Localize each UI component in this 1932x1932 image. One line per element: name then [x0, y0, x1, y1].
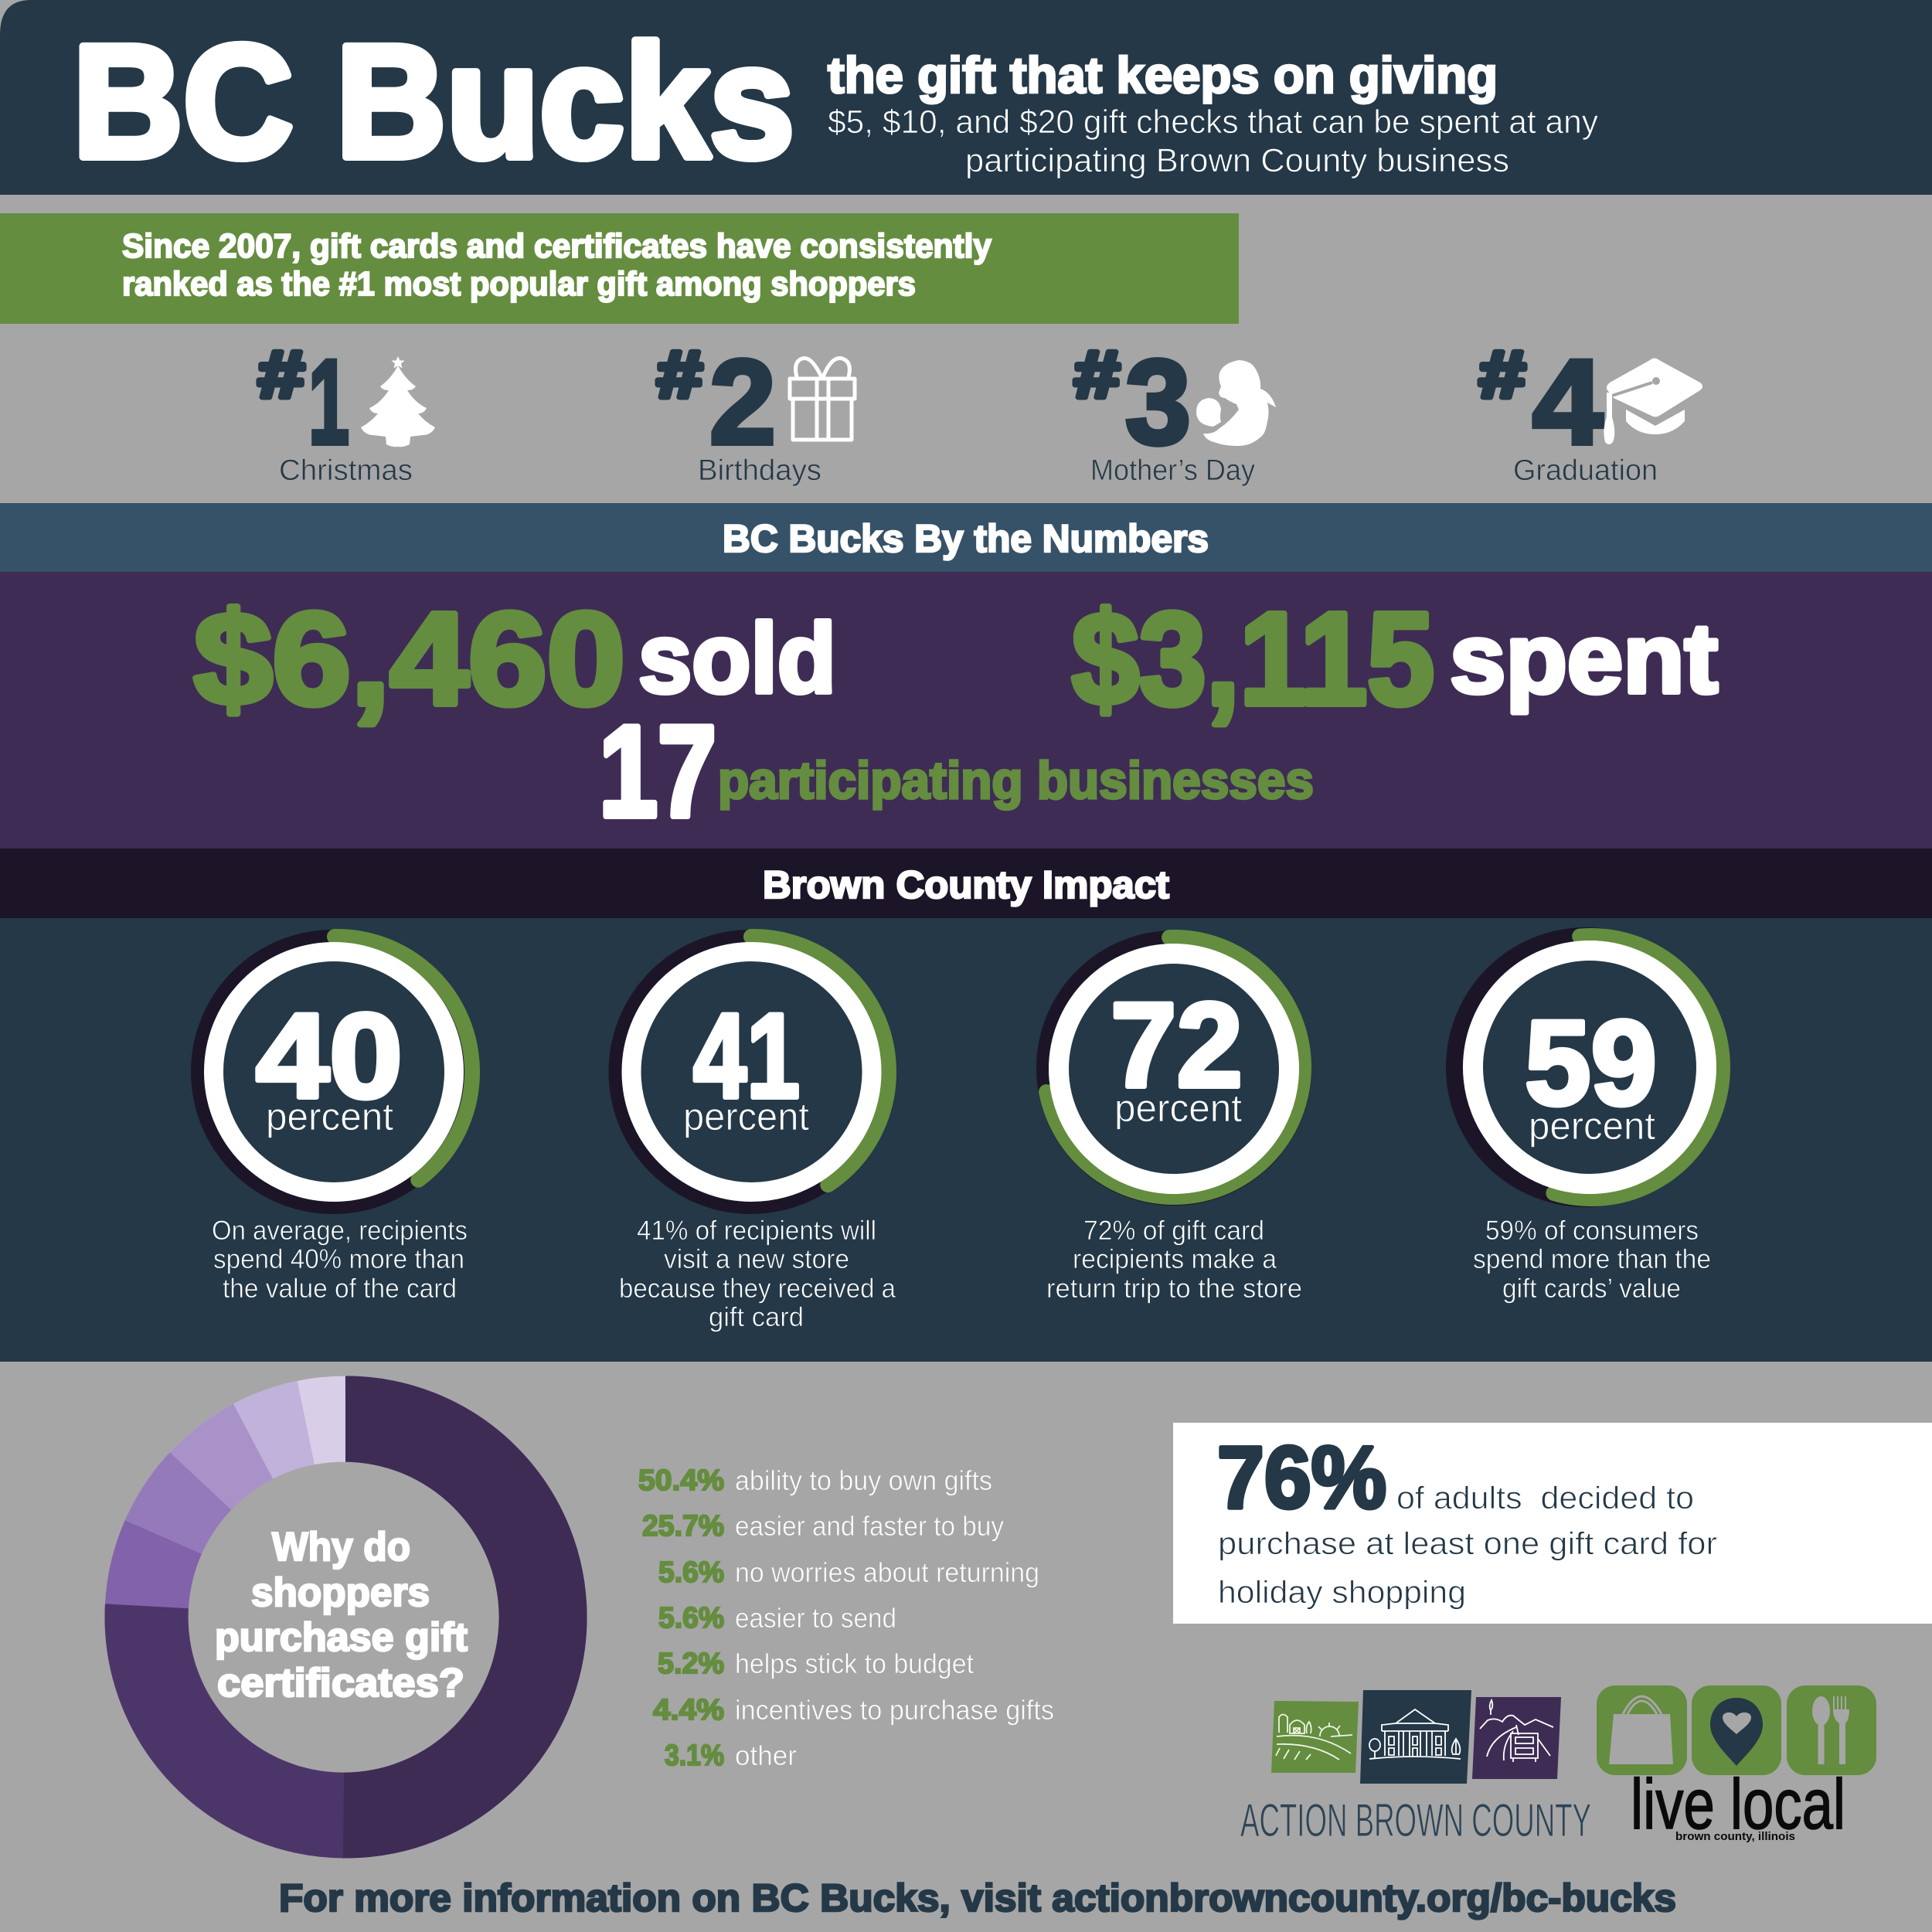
heading band: by the numbers: BC Bucks By the Numbers: [723, 517, 1209, 560]
caption: 59 percent: 59% of consumers: [1485, 1216, 1699, 1246]
logo tile: road and bus: [1472, 1697, 1561, 1779]
heading band: Brown County Impact: Brown County Impact: [763, 863, 1169, 906]
banner text: Since 2007, gift cards and certificates have consistently: [122, 227, 992, 265]
panel: impact: [0, 918, 1932, 1362]
icon: christmas tree: [361, 356, 435, 447]
caption: 59 percent: gift cards’ value: [1502, 1274, 1681, 1304]
rank 2 Birthdays: [657, 335, 855, 487]
title: BC Bucks: [73, 12, 794, 192]
caption: 72 percent: recipients make a: [1073, 1244, 1277, 1274]
rank 1 Christmas: 1: [308, 335, 349, 470]
stat: sold: sold: [638, 604, 836, 714]
callout text: of adults decided to: [1396, 1480, 1694, 1515]
stat: participating businesses: 17: [599, 699, 716, 844]
logo tile: farm: [1271, 1701, 1359, 1773]
callout: 76 percent: [1173, 1423, 1932, 1624]
rank 2 Birthdays: #: [657, 338, 702, 412]
stat ring: 40 percent: [199, 934, 474, 1209]
callout text: holiday shopping: [1218, 1574, 1466, 1610]
logo tile: courthouse: [1360, 1690, 1471, 1784]
reason labels: incentives to purchase gifts: [735, 1694, 1054, 1726]
reason labels: ability to buy own gifts: [735, 1464, 992, 1496]
percentages: 3.1%: [665, 1740, 724, 1772]
logo: live local: [1597, 1685, 1876, 1844]
banner text: ranked as the #1 most popular gift among shoppers: [122, 265, 916, 303]
rank 4 Graduation: #: [1479, 338, 1526, 412]
donut centre question: purchase gift: [215, 1615, 468, 1660]
footer call to action: For more information on BC Bucks, visit actionbrowncounty.org/bc-bucks: [279, 1876, 1676, 1920]
icon: spoon and fork: [1787, 1685, 1876, 1775]
stat ring: 40 percent: percent: [266, 1095, 393, 1138]
description: participating Brown County business: [965, 142, 1509, 179]
stat: spent: [1072, 586, 1718, 733]
donut chart: why shoppers purchase gift certificates: [153, 1425, 538, 1810]
caption: 41 percent: [619, 1216, 896, 1332]
logo tagline: brown county, illinois: [1675, 1830, 1795, 1843]
stat ring: 72 percent: 72: [1111, 978, 1243, 1113]
stat: participating businesses: participating businesses: [718, 751, 1314, 810]
percentages: 5.6%: [658, 1556, 724, 1589]
icon: graduation cap: [1604, 359, 1702, 444]
icon: gift box: [790, 359, 855, 440]
stat ring: 59 percent: percent: [1529, 1104, 1655, 1148]
donut centre question: shoppers: [251, 1570, 430, 1615]
callout text: purchase at least one gift card for: [1218, 1526, 1717, 1561]
logo wordmark: live local: [1631, 1765, 1845, 1844]
percentages: 5.6%: [658, 1602, 724, 1634]
caption: 41 percent: gift card: [709, 1302, 804, 1332]
callout text: [1218, 1480, 1717, 1610]
panel: green banner: [0, 213, 1239, 324]
stat ring: 72 percent: [1039, 933, 1308, 1202]
stat: sold: $6,460: [194, 586, 625, 733]
rank 3 Mother's Day: 3: [1125, 335, 1191, 470]
stat ring: 41 percent: percent: [683, 1095, 809, 1138]
caption: 41 percent: visit a new store: [664, 1244, 849, 1274]
percentages: 50.4%: [638, 1464, 724, 1497]
donut centre question: Why do: [272, 1525, 410, 1570]
percentages: 25.7%: [642, 1510, 724, 1543]
reason labels: helps stick to budget: [735, 1648, 974, 1679]
reason labels: no worries about returning: [735, 1556, 1039, 1588]
reason labels: easier to send: [735, 1602, 896, 1634]
panel: by the numbers: [0, 572, 1932, 849]
stat ring: 59 percent: [1449, 925, 1733, 1209]
label: Graduation: Graduation: [1513, 454, 1658, 487]
caption: 59 percent: [1473, 1216, 1711, 1304]
heading band: Brown County Impact: [0, 849, 1932, 918]
logo: Action Brown County: [1240, 1690, 1591, 1846]
percentages: [638, 1464, 724, 1772]
stat ring: 40 percent: 40: [256, 989, 403, 1124]
donut centre question: certificates?: [217, 1661, 464, 1706]
banner text: [122, 227, 992, 303]
panel: header: [0, 0, 1932, 195]
caption: 40 percent: spend 40% more than: [213, 1244, 464, 1274]
caption: 40 percent: the value of the card: [223, 1274, 457, 1304]
heading band: by the numbers: [0, 503, 1932, 572]
reason labels: easier and faster to buy: [735, 1510, 1004, 1542]
legend: reasons list: [638, 1464, 1054, 1772]
description: [828, 104, 1598, 179]
label: Birthdays: Birthdays: [698, 454, 821, 487]
caption: 72 percent: 72% of gift card: [1083, 1216, 1264, 1246]
percentages: 4.4%: [653, 1694, 724, 1726]
stat ring: 41 percent: [616, 934, 891, 1209]
stat: spent: $3,115: [1072, 586, 1434, 733]
percentages: 5.2%: [658, 1648, 724, 1680]
callout: 76 percent: 76%: [1217, 1429, 1386, 1527]
caption: 59 percent: spend more than the: [1473, 1244, 1711, 1274]
rank 4 Graduation: [1479, 335, 1702, 487]
caption: 41 percent: because they received a: [619, 1274, 896, 1304]
caption: 41 percent: 41% of recipients will: [637, 1216, 876, 1246]
stat: participating businesses: [599, 699, 1314, 844]
caption: 72 percent: return trip to the store: [1046, 1274, 1302, 1304]
tagline: the gift that keeps on giving: [828, 46, 1498, 104]
caption: 72 percent: [1046, 1216, 1302, 1304]
caption: 40 percent: On average, recipients: [212, 1216, 468, 1246]
rank 3 Mother's Day: [1074, 335, 1276, 487]
stat: sold: [194, 586, 836, 733]
description: $5, $10, and $20 gift checks that can be spent at any: [828, 104, 1598, 141]
stat: spent: spent: [1450, 604, 1718, 714]
stat ring: 72 percent: percent: [1114, 1087, 1242, 1130]
icon: map pin with heart: [1692, 1685, 1781, 1775]
caption: 40 percent: [212, 1216, 468, 1304]
rank 1 Christmas: #: [258, 338, 304, 412]
stat ring: 59 percent: 59: [1525, 996, 1657, 1131]
label: Mother's Day: Mother’s Day: [1090, 454, 1255, 487]
rank 4 Graduation: 4: [1532, 335, 1603, 470]
reason labels: other: [735, 1740, 797, 1771]
rank 3 Mother's Day: #: [1074, 338, 1120, 412]
reason labels: [735, 1464, 1054, 1771]
donut centre question: [215, 1525, 468, 1706]
rank 1 Christmas: [258, 335, 435, 487]
label: Christmas: Christmas: [279, 454, 413, 487]
stat ring: 41 percent: 41: [693, 989, 800, 1124]
logo wordmark: ACTION BROWN COUNTY: [1240, 1794, 1591, 1846]
icon: mother and baby: [1196, 360, 1276, 446]
icon: shopping bag: [1597, 1685, 1687, 1775]
rank 2 Birthdays: 2: [709, 335, 776, 470]
panel: rankings: [258, 335, 1702, 487]
